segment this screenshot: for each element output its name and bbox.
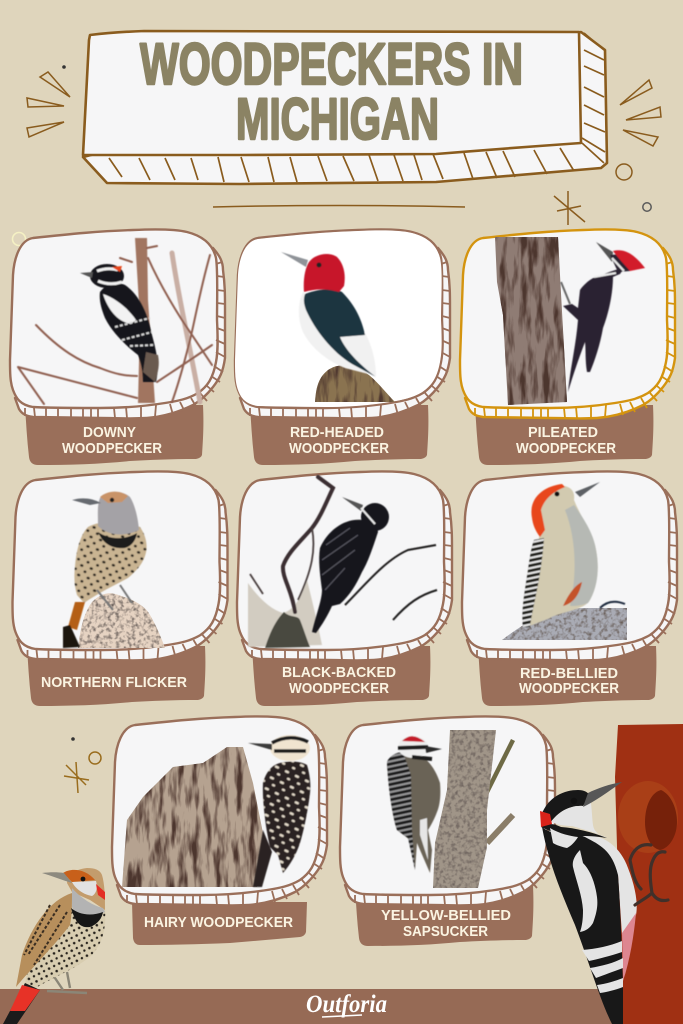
label text <box>519 665 619 697</box>
card: Hairy Woodpecker <box>112 716 327 945</box>
photo frame <box>340 716 555 905</box>
label plate <box>132 902 307 945</box>
title text <box>140 32 523 152</box>
branches <box>18 238 212 404</box>
decorative sparks <box>12 65 661 793</box>
label plate <box>27 646 205 706</box>
label text: PILEATED <box>528 424 598 441</box>
label text: WOODPECKER <box>289 680 389 697</box>
rock <box>502 608 627 640</box>
label text: DOWNY <box>83 424 136 441</box>
label text: RED-BELLIED <box>520 665 618 682</box>
bird: hairy <box>248 735 310 887</box>
label text: HAIRY WOODPECKER <box>144 914 293 931</box>
bird: red-bellied <box>522 482 625 627</box>
feet <box>630 845 668 905</box>
label plate <box>355 886 533 946</box>
bird: black-backed <box>312 497 389 633</box>
tree trunk with hole <box>615 724 683 1024</box>
card: Pileated Woodpecker <box>460 229 675 465</box>
tree <box>433 730 513 888</box>
label text: BLACK-BACKED <box>282 664 396 681</box>
bird: pileated <box>561 242 645 392</box>
logo: Outforia: Outforia <box>306 991 387 1018</box>
label text: YELLOW-BELLIED <box>381 907 511 924</box>
label text <box>516 424 616 457</box>
label plate <box>252 646 430 706</box>
label text <box>381 907 511 940</box>
label plate <box>478 646 656 706</box>
bird: red-headed <box>281 252 376 377</box>
label text <box>62 424 162 457</box>
photo frame <box>462 471 677 660</box>
label text <box>282 664 396 697</box>
photo frame <box>235 229 450 418</box>
photo frame <box>237 471 452 660</box>
bird: flicker <box>63 492 147 648</box>
card: Black-backed Woodpecker <box>237 471 452 706</box>
label text: RED-HEADED <box>290 424 384 441</box>
stump <box>315 365 395 402</box>
card: Northern Flicker <box>12 471 228 706</box>
label plate <box>475 405 653 465</box>
bird: downy <box>80 264 159 382</box>
photo frame <box>460 229 675 418</box>
title text: WOODPECKERS IN <box>140 32 523 97</box>
bird: sapsucker <box>387 736 442 873</box>
trunk <box>495 237 567 405</box>
photo frame <box>12 471 228 660</box>
stump and branches <box>248 477 437 648</box>
footer band <box>0 989 683 1024</box>
white face <box>235 230 442 407</box>
photo frame <box>112 716 327 905</box>
label text <box>289 424 389 457</box>
title text: MICHIGAN <box>236 87 439 152</box>
illustration: northern flicker <box>3 868 105 1024</box>
title banner <box>83 31 607 184</box>
label text: WOODPECKER <box>516 440 616 457</box>
label text: NORTHERN FLICKER <box>41 674 187 691</box>
label plate <box>250 405 428 465</box>
card: Yellow-bellied Sapsucker <box>340 716 555 946</box>
label plate <box>25 405 203 465</box>
label text: SAPSUCKER <box>403 923 488 940</box>
label text: WOODPECKER <box>519 680 619 697</box>
illustration: great spotted woodpecker <box>540 782 668 1024</box>
card: Red-headed Woodpecker <box>235 229 450 465</box>
card: Downy Woodpecker <box>10 229 225 465</box>
label text: WOODPECKER <box>289 440 389 457</box>
photo frame <box>10 229 225 418</box>
stump <box>122 747 263 887</box>
rock <box>78 593 165 648</box>
label text: WOODPECKER <box>62 440 162 457</box>
card: Red-bellied Woodpecker <box>462 471 677 706</box>
